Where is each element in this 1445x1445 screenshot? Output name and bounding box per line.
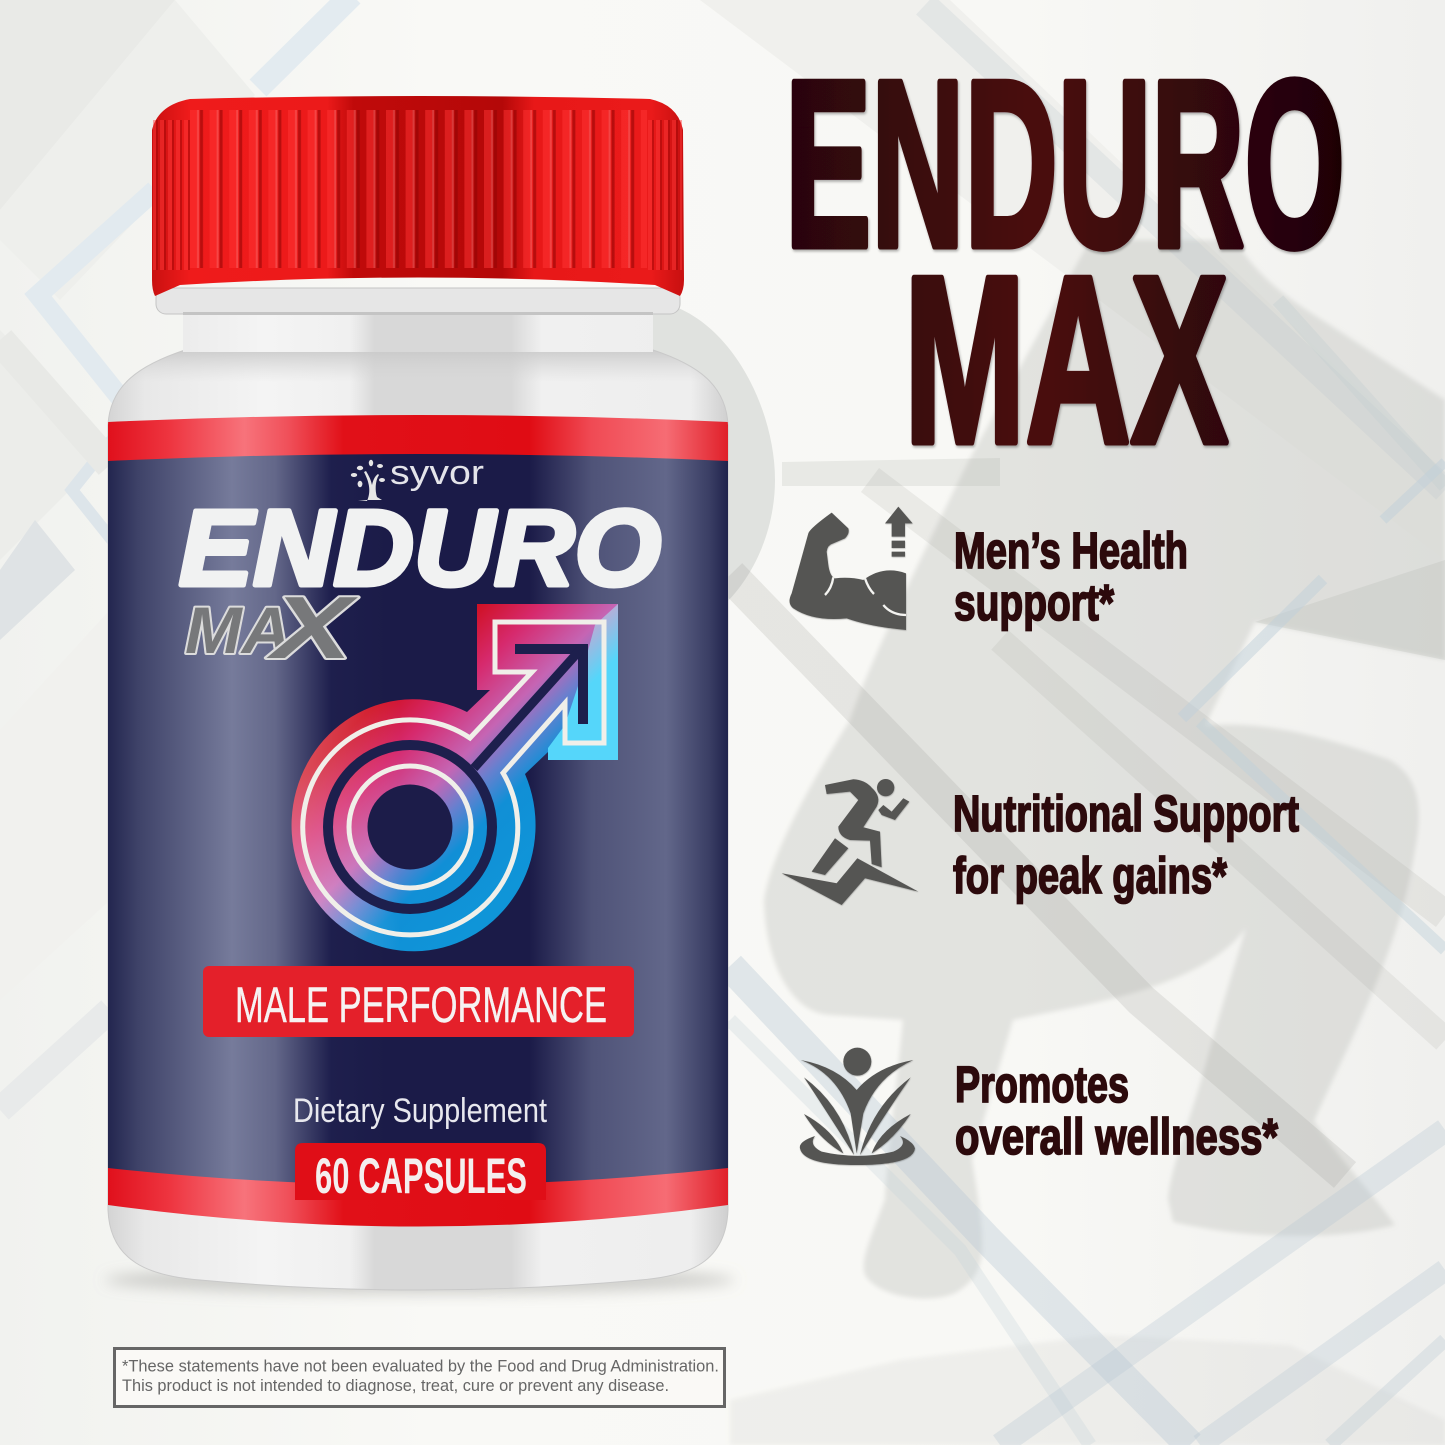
feature text xyxy=(954,522,1188,631)
brand logo: syvor: syvor xyxy=(390,454,484,492)
feature text xyxy=(953,785,1299,904)
bottom red band xyxy=(108,1168,728,1226)
title xyxy=(785,32,1345,493)
icon: runner xyxy=(782,779,918,905)
feature text: Men’s Health xyxy=(954,522,1188,579)
feature text xyxy=(955,1056,1278,1165)
label xyxy=(108,415,728,1226)
product name: MAX xyxy=(185,578,359,677)
feature text: support* xyxy=(954,574,1114,631)
bottle body xyxy=(108,350,728,1290)
product name: ENDURO: ENDURO xyxy=(179,487,661,608)
badge: 60 capsules: 60 CAPSULES xyxy=(315,1148,527,1204)
product bottle xyxy=(108,96,728,1290)
red screw cap xyxy=(152,96,684,296)
feature text: Nutritional Support xyxy=(953,785,1299,842)
feature: men's health xyxy=(790,507,1188,631)
badge: male performance: MALE PERFORMANCE xyxy=(235,977,607,1033)
badge: 60 capsules xyxy=(295,1143,546,1204)
dietary supplement text: Dietary Supplement xyxy=(293,1092,547,1130)
icon: flexed arm with arrow xyxy=(790,507,913,630)
feature: nutritional support xyxy=(782,779,1299,905)
icon: tree xyxy=(351,460,385,501)
badge: male performance xyxy=(203,966,634,1037)
icon: male symbol xyxy=(292,604,618,951)
feature text: for peak gains* xyxy=(953,847,1227,904)
disclaimer box: *These statements have not been evaluated by the Food and Drug Administration. xyxy=(122,1358,719,1376)
disclaimer box xyxy=(114,1348,724,1406)
product name: MAX: X xyxy=(265,578,359,677)
brand logo: syvor xyxy=(351,454,484,501)
feature text: overall wellness* xyxy=(955,1108,1278,1165)
disclaimer box: This product is not intended to diagnose, treat, cure or prevent any disease. xyxy=(122,1377,669,1395)
bottle neck xyxy=(156,288,680,352)
feature text: Promotes xyxy=(955,1056,1129,1113)
shoulder shading xyxy=(144,350,694,374)
title: MAX xyxy=(904,228,1228,493)
product name: MAX: MA xyxy=(185,593,291,667)
feature: overall wellness xyxy=(800,1048,1278,1165)
top red band xyxy=(108,415,728,461)
icon: wellness figure xyxy=(800,1048,915,1165)
